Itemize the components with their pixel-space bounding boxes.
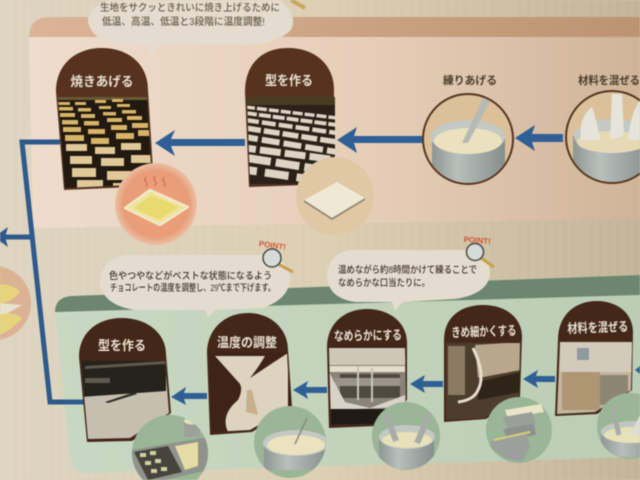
step: 温度の調整 bbox=[207, 313, 330, 478]
icon: roller stack bbox=[486, 397, 552, 463]
photo: cut dough on belt bbox=[245, 96, 337, 188]
photo: mixer tank bbox=[555, 341, 635, 416]
icon: mixing bowl with stick bbox=[597, 393, 640, 459]
arrow: to 温度の調整 bbox=[293, 381, 327, 399]
step: きめ細かくする bbox=[444, 305, 552, 463]
heading: 温度の調整 bbox=[217, 335, 277, 350]
icon: sandwich cookie circle, left edge bbox=[0, 266, 31, 340]
icon: baked biscuit circle bbox=[115, 163, 197, 245]
panel: chocolate process (green) bbox=[55, 275, 640, 473]
step: 焼きあげる bbox=[56, 48, 197, 245]
callout: tempering point bbox=[100, 255, 290, 317]
heading: 焼きあげる bbox=[70, 74, 134, 89]
photo: biscuits on conveyor bbox=[56, 96, 156, 192]
callout: refining point bbox=[327, 250, 490, 311]
step: 材料を混ぜる (chocolate) bbox=[555, 301, 640, 459]
label: 練りあげる bbox=[443, 73, 497, 87]
icon: bowl with stick bbox=[254, 406, 330, 478]
step: 材料を混ぜる (biscuit) bbox=[566, 73, 640, 184]
callout: baking temperature bbox=[88, 0, 293, 60]
icon: magnifier with POINT! (refining): POINT! bbox=[463, 235, 491, 246]
heading: きめ細かくする bbox=[451, 323, 517, 340]
step: 型を作る (biscuit) bbox=[245, 48, 374, 235]
callout: tempering point: 色やつやなどがベストな状態になるよう bbox=[109, 270, 272, 282]
callout: refining point: 温めながら約8時間かけて練ることで bbox=[338, 264, 477, 276]
callout: baking temperature: 生地をサクッときれいに焼き上げるために bbox=[100, 1, 280, 14]
arrow: to 焼きあげる bbox=[155, 130, 245, 156]
arrow: to なめらかにする bbox=[410, 375, 443, 393]
icon: magnifier handle, top bbox=[291, 0, 305, 8]
arrow: into 材料を混ぜる bbox=[635, 366, 640, 374]
step: なめらかにする bbox=[327, 309, 440, 470]
step: 型を作る (chocolate) bbox=[78, 318, 208, 480]
heading: なめらかにする bbox=[334, 327, 402, 344]
callout: refining point: なめらかな口当たりに。 bbox=[338, 277, 430, 289]
heading: 型を作る bbox=[98, 338, 146, 353]
arrow: to 練りあげる bbox=[515, 125, 563, 151]
arrow: to 型を作る bbox=[337, 127, 422, 153]
arch with heading bbox=[56, 48, 154, 190]
arch with heading bbox=[245, 48, 334, 187]
arrow: to 型を作る (chocolate) bbox=[171, 387, 207, 405]
icon: magnifier with POINT! (refining) bbox=[463, 235, 494, 267]
icon: dough sheet circle bbox=[296, 157, 374, 235]
icon: moulding machine bbox=[132, 415, 208, 480]
panel: baking process (pink) bbox=[29, 17, 640, 228]
photo: tempering chocolate bbox=[214, 353, 289, 432]
icon: magnifier with POINT! (tempering): POINT! bbox=[258, 239, 286, 252]
icon: bowl with two rollers bbox=[372, 402, 440, 470]
arch with heading bbox=[327, 309, 407, 428]
arch with heading bbox=[444, 305, 522, 422]
arch with heading bbox=[79, 318, 171, 442]
icon: kneading bowl bbox=[423, 94, 513, 184]
photo: refining machine bbox=[327, 347, 409, 427]
arch with heading bbox=[207, 313, 292, 435]
callout: baking temperature: 低温、高温、低温と3段階に温度調整! bbox=[102, 15, 265, 28]
arch with heading bbox=[555, 301, 633, 416]
arrow: to きめ細かくする bbox=[523, 370, 555, 388]
icon: magnifier with POINT! (tempering) bbox=[258, 239, 293, 272]
callout: tempering point: チョコレートの温度を調整し、29℃まで下げます。 bbox=[110, 282, 275, 294]
photo: factory floor bbox=[78, 360, 173, 442]
photo: refiner rollers bbox=[444, 342, 522, 422]
connector line: blue flow between processes bbox=[0, 142, 84, 402]
step: 練りあげる bbox=[423, 73, 513, 184]
heading: 型を作る bbox=[265, 73, 313, 88]
icon: mixing bowl bbox=[566, 91, 640, 184]
